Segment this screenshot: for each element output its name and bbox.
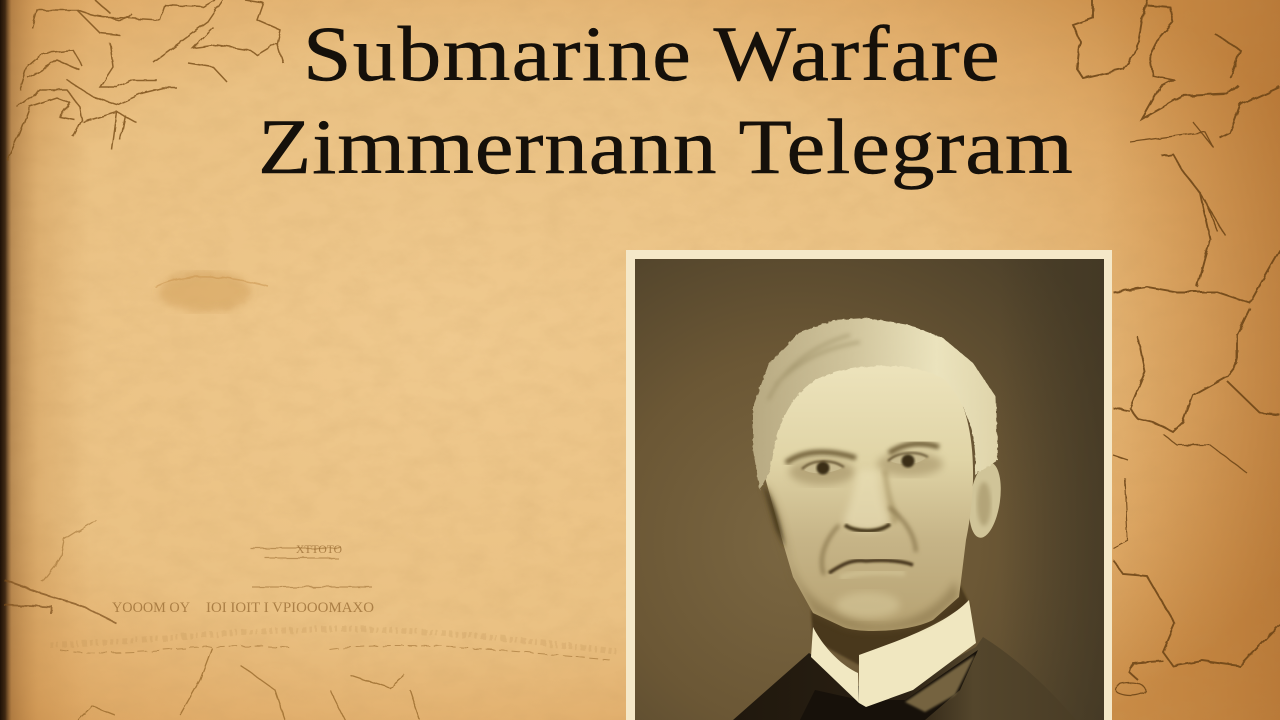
cheek creases <box>822 507 916 575</box>
map lines: bottom left <box>4 520 620 720</box>
face <box>763 345 973 631</box>
background vignette <box>1000 259 1104 720</box>
stain <box>155 272 268 312</box>
title line 2: Zimmernann Telegram <box>258 103 1074 190</box>
left shirt collar <box>811 627 859 703</box>
map lines: top left <box>7 0 283 160</box>
photo background <box>635 259 1104 720</box>
eyes <box>802 453 928 474</box>
chin highlight <box>836 592 900 618</box>
faded map inscription <box>112 542 374 616</box>
photo frame <box>626 250 1112 720</box>
left head shadow <box>763 485 785 548</box>
bow tie <box>800 650 978 720</box>
hair <box>753 318 998 490</box>
mouth <box>829 560 913 573</box>
eyebrows <box>786 444 939 463</box>
nose <box>843 470 890 531</box>
title line 1: Submarine Warfare <box>303 10 1001 97</box>
hair strands <box>768 335 860 400</box>
jaw shading <box>763 483 959 631</box>
right shirt collar <box>859 600 976 707</box>
map lines: top right <box>1073 0 1280 695</box>
faded map inscription: IOI IOIT I VPIOOOMAXO <box>206 600 374 616</box>
faded map inscription: XTTOTO <box>296 542 342 556</box>
coat <box>733 637 1076 720</box>
eye sockets <box>789 459 855 485</box>
faded map inscription: YOOOM OY <box>112 600 190 616</box>
ear <box>965 460 1005 540</box>
title <box>258 10 1074 190</box>
neck shadow <box>811 585 970 665</box>
